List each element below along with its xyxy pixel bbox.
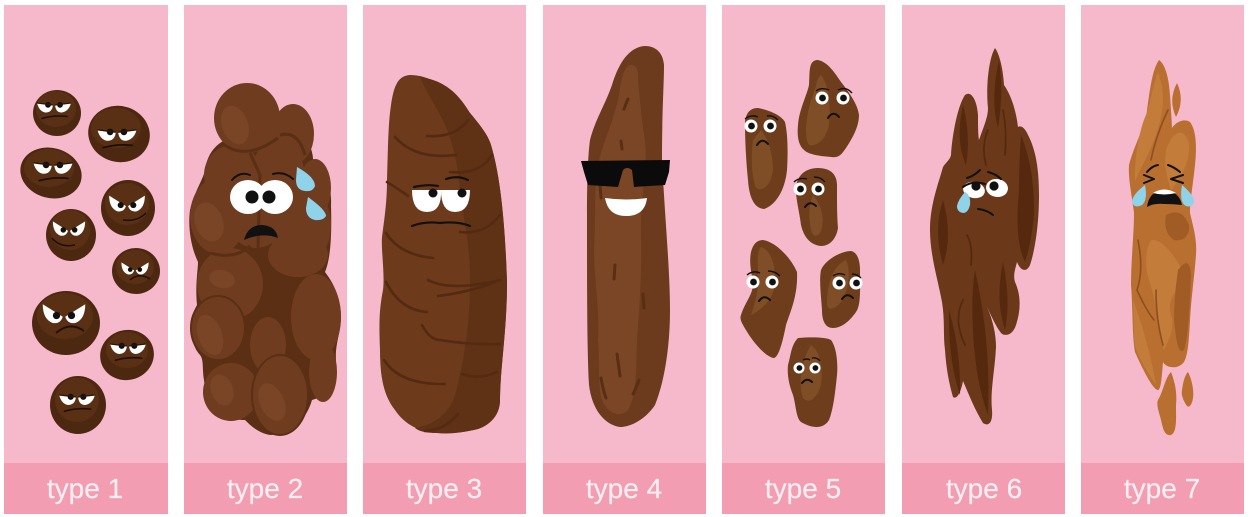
panel: type 6 (902, 5, 1065, 514)
blob e (820, 251, 862, 328)
pellet 3 (15, 141, 87, 205)
cracked sausage body (379, 75, 507, 433)
label bar: type 2: type 2 (227, 473, 303, 504)
face: bored half-lidded eyes (412, 177, 470, 226)
icon: tears (1132, 185, 1194, 206)
label bar: type 7 (1081, 463, 1244, 514)
smile (605, 198, 647, 216)
face: scared eyes and mouth (230, 173, 293, 240)
label bar: type 2 (184, 463, 347, 514)
smooth sausage body (587, 46, 670, 427)
panel: type 1 (4, 5, 168, 514)
blob f (788, 337, 837, 427)
label bar: type 3: type 3 (406, 473, 482, 504)
icon: sunglasses (581, 160, 670, 187)
label bar: type 1 (4, 463, 168, 514)
label bar: type 5 (722, 463, 885, 514)
face: crying (1144, 165, 1183, 207)
pellet 5 (46, 209, 96, 261)
pellet 2 (82, 99, 156, 169)
panel: type 4 (543, 5, 706, 514)
pellet 9 (50, 376, 106, 434)
blob b (744, 108, 788, 209)
panel: type 5 (722, 5, 885, 514)
panel: type 2 (184, 5, 347, 514)
icon: tear (957, 192, 970, 213)
label bar: type 5: type 5 (765, 473, 841, 504)
label bar: type 7: type 7 (1124, 473, 1200, 504)
label bar: type 6 (902, 463, 1065, 514)
pellet 8 (94, 324, 160, 386)
blob d (740, 240, 797, 358)
blob a (798, 60, 859, 157)
soft blobs group (740, 60, 862, 427)
pellets: nine angry round pieces (15, 90, 160, 434)
label bar: type 3 (363, 463, 526, 514)
runny body (1129, 60, 1196, 390)
pellet 1 (33, 90, 81, 136)
label bar: type 6: type 6 (946, 473, 1022, 504)
pellet 4 (101, 180, 155, 236)
drips (1157, 83, 1193, 435)
panel: type 7 (1081, 5, 1244, 514)
label bar: type 4 (543, 463, 706, 514)
icon: sweat drops (296, 167, 326, 220)
panel: type 3 (363, 5, 526, 514)
lumpy sausage body (189, 83, 341, 435)
pellet 6 (112, 248, 160, 294)
label bar: type 1: type 1 (47, 473, 123, 504)
face: sad eyes (962, 170, 1009, 215)
blob c (794, 168, 838, 246)
pellet 7 (32, 291, 100, 355)
fluffy torn body (930, 48, 1039, 424)
highlights (189, 102, 291, 425)
label bar: type 4: type 4 (586, 473, 662, 504)
